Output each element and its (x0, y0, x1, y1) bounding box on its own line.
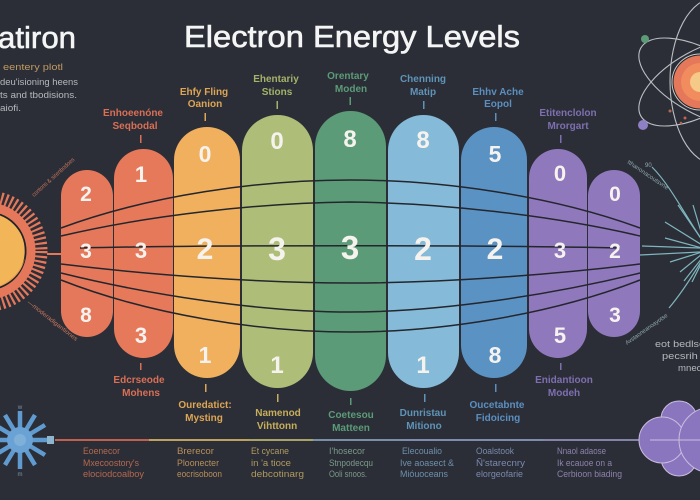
column 8 numbers: 3 (554, 238, 566, 263)
icon: radiating lines: Avstaoneanoayotse (625, 313, 670, 347)
footnote columns: Elecoualio (402, 446, 442, 456)
bottom labels: Edcrseode (113, 375, 165, 386)
panel: level 4 column (242, 115, 313, 388)
column 6 numbers (414, 127, 432, 379)
cropped left heading and intro (0, 20, 78, 114)
footnote columns: Et cycane (251, 446, 289, 456)
column 8 numbers (554, 161, 566, 348)
column 3 numbers: 1 (199, 342, 212, 368)
footnote columns: Ik ecauoe on a (557, 458, 612, 468)
column 7 numbers: 8 (489, 342, 502, 368)
column 2 numbers (135, 162, 147, 348)
column 1 numbers: 2 (80, 183, 92, 206)
footnote columns: Brerecor (177, 446, 214, 456)
top labels: Mrorgart (547, 121, 589, 132)
bottom labels: Mysting (185, 413, 223, 424)
top labels: Etitenclolon (539, 108, 597, 119)
column 2 numbers: 3 (135, 323, 147, 348)
panel: level 9 column (588, 170, 640, 337)
icon: atom (625, 0, 700, 164)
top labels: Chenning (400, 74, 446, 85)
footnote columns: in 'a tioce (251, 458, 291, 468)
right note (655, 339, 700, 374)
column 3 numbers: 2 (197, 233, 213, 266)
top labels: Ehentariy (253, 74, 299, 85)
icon: sun (0, 157, 78, 343)
icon: blue burst: m (18, 472, 22, 478)
footnote columns: Ooalstook (476, 446, 514, 456)
bottom labels: Mitiono (406, 421, 442, 432)
column 1 numbers (80, 183, 92, 327)
cropped left heading and intro: atiron (0, 20, 76, 55)
footnote columns: Mxecoostory's (83, 458, 139, 468)
column 4 numbers: 1 (270, 352, 284, 379)
icon: purple cluster (639, 401, 700, 476)
bottom labels: Vihttonn (257, 421, 297, 432)
bottom labels: Coetesou (328, 410, 374, 421)
column 9 numbers: 0 (609, 183, 621, 206)
column 2 numbers: 1 (135, 162, 147, 187)
column 6 numbers: 1 (416, 352, 430, 379)
footnote columns: Stnpodecqu (329, 458, 373, 468)
footnote columns: Mióuoceans (400, 469, 448, 479)
column 2 numbers: 3 (135, 238, 147, 263)
bottom labels: Dunristau (400, 408, 446, 419)
column 5 numbers: 8 (343, 126, 357, 153)
column 7 numbers: 5 (489, 141, 502, 167)
bottom labels: Oucetabnte (469, 400, 525, 411)
column 4 numbers (268, 128, 286, 379)
panel: level 8 column (529, 149, 587, 358)
footnote columns: Nnaol adaose (557, 446, 606, 456)
column 8 numbers: 0 (554, 161, 566, 186)
column 7 numbers (487, 141, 503, 368)
column 5 numbers (341, 126, 359, 266)
panel: level 7 column (461, 127, 527, 378)
footnote columns: Ploonecter (177, 458, 219, 468)
top labels: Moden (335, 84, 367, 95)
icon: radiating lines: 90 (645, 163, 652, 169)
footnote columns: Ooli snoos. (329, 469, 367, 479)
column 1 numbers: 3 (80, 240, 92, 263)
column 1 numbers: 8 (80, 304, 92, 327)
footnote columns: Eoenecor (83, 446, 120, 456)
timeline bar (55, 439, 643, 441)
bottom labels: Fidoicing (476, 413, 520, 424)
footnote columns: debcotinarg (251, 469, 304, 479)
column 9 numbers (609, 183, 621, 327)
bottom labels: Ouredatict: (178, 400, 232, 411)
top labels: Matip (410, 87, 436, 98)
panel: level 2 column (114, 149, 173, 358)
icon: radiating lines (625, 160, 700, 347)
bottom labels: Enidantioon (535, 375, 593, 386)
right note: pecsrih t (662, 351, 700, 362)
cropped left heading and intro: ts and tbodisions. (0, 90, 77, 101)
footnote columns (83, 446, 622, 479)
footnote columns: elociodcoalboy (83, 469, 145, 479)
column 9 numbers: 3 (609, 304, 621, 327)
column 7 numbers: 2 (487, 233, 503, 266)
top labels (103, 71, 597, 143)
footnote columns: Ñ'starecnry (476, 458, 526, 468)
bottom labels: Mohens (122, 388, 160, 399)
cropped left heading and intro: aiofi. (0, 103, 21, 114)
energy level curves (61, 180, 640, 332)
icon: radiating lines: tthanonacoutsvne (626, 160, 670, 192)
column 5 numbers: 3 (341, 229, 359, 266)
bottom labels: Modeh (548, 388, 580, 399)
column 4 numbers: 0 (270, 128, 284, 155)
bottom labels: Namenod (255, 408, 301, 419)
panel: level 5 column (315, 111, 386, 391)
footnote columns: eocrisoboon (177, 469, 222, 479)
top labels: Ehfy Fling (180, 87, 228, 98)
column 9 numbers: 2 (609, 240, 621, 263)
top labels: Seqbodal (112, 121, 158, 132)
title: Electron Energy Levels (184, 19, 520, 54)
icon: sun: contons & sirenbodoes (31, 157, 76, 198)
bottom labels (113, 363, 593, 434)
footnote columns: Ive aoasect & (400, 458, 454, 468)
top labels: Oanion (188, 99, 222, 110)
column 6 numbers: 8 (416, 127, 430, 154)
cropped left heading and intro: deu'isioning heens (0, 77, 78, 88)
panel: level 3 column (174, 127, 240, 378)
top labels: Ehhv Ache (472, 87, 524, 98)
column 4 numbers: 3 (268, 231, 286, 267)
column 6 numbers: 2 (414, 231, 432, 267)
panel: level 1 column (61, 170, 113, 337)
column 3 numbers (197, 141, 213, 368)
right note: eot bedlse (655, 339, 700, 350)
bottom labels: Matteen (332, 423, 370, 434)
icon: blue burst: w (17, 405, 23, 411)
panel: level 6 column (388, 115, 459, 388)
icon: blue burst (0, 405, 54, 478)
column 8 numbers: 5 (554, 323, 566, 348)
footnote columns: Cerbioon biading (557, 469, 622, 479)
footnote columns: I'hosecor (329, 446, 365, 456)
cropped left heading and intro: eentery plotl (3, 62, 63, 73)
top labels: Enhoeenóne (103, 108, 163, 119)
column 3 numbers: 0 (199, 141, 211, 167)
top labels: Orentary (327, 71, 369, 82)
top labels: Stions (262, 87, 293, 98)
icon: sun: —moderadigantiones (26, 300, 78, 343)
footnote columns: elorgeofarie (476, 469, 523, 479)
top labels: Eopol (484, 99, 512, 110)
